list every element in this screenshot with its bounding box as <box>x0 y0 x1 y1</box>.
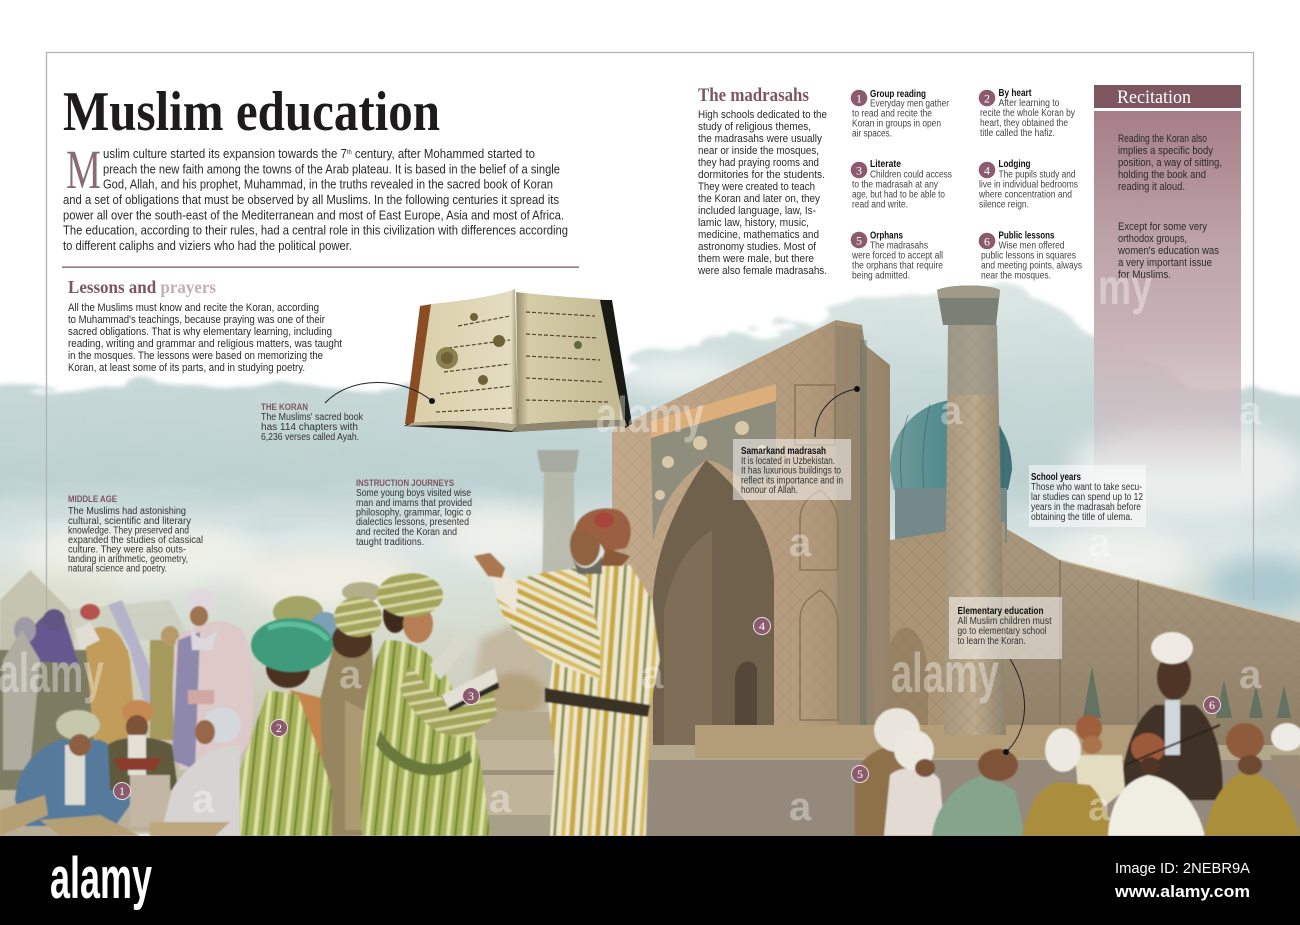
the madrasahs: were also female madrasahs. <box>697 265 827 277</box>
stock watermarks: a <box>1239 653 1262 697</box>
recitation panel: for Muslims. <box>1118 269 1171 281</box>
numbered note 6: public lessons: Wise men offered <box>998 240 1064 252</box>
numbered note 3: literate <box>851 159 952 210</box>
footer bar <box>0 836 1300 925</box>
intro paragraph: to different caliphs and viziers who had the political power. <box>63 238 352 253</box>
numbered note 4: lodging: where concentration and <box>978 190 1072 200</box>
the madrasahs: High schools dedicated to the <box>698 109 827 121</box>
callout: school years <box>1029 465 1146 527</box>
stock watermarks: alamy <box>596 387 704 443</box>
caption: the koran: 6,236 verses called Ayah. <box>261 432 359 443</box>
caption: middle age: natural science and poetry. <box>68 564 167 574</box>
lessons and prayers: Koran, at least some of its parts, and in studying poetry. <box>68 362 305 374</box>
frame <box>46 52 1254 610</box>
callout: school years: obtaining the title of ulema. <box>1031 512 1132 523</box>
the madrasahs: near or inside the mosques, <box>698 145 819 157</box>
numbered note 2: by heart: heart, they obtained the <box>980 118 1068 129</box>
scene number markers <box>114 618 1220 800</box>
numbered note 1: group reading: 1 <box>856 92 862 106</box>
intro paragraph: The education, according to their rules, had a central role in this civilization with differences according <box>63 223 568 238</box>
caption: middle age: The Muslims had astonishing <box>68 506 186 517</box>
terrace in front of the madrasah <box>695 725 1165 758</box>
numbered note 2: by heart <box>979 88 1075 139</box>
numbered note 6: public lessons: and meeting points, always <box>981 260 1082 272</box>
main iwan of the madrasah <box>612 320 890 745</box>
numbered note 1: group reading: air spaces. <box>852 128 892 140</box>
callout: elementary education: to learn the Koran. <box>958 636 1026 647</box>
lessons and prayers: sacred obligations. That is why elementary learning, including <box>68 326 332 338</box>
numbered note 6: public lessons: 6 <box>984 234 990 248</box>
the madrasahs <box>697 85 827 277</box>
lower hall of the madrasah <box>878 522 1005 745</box>
recitation panel: a very important issue <box>1118 257 1212 269</box>
intro paragraph: God, Allah, and his prophet, Muhammad, in the truths revealed in the sacred book of Koran <box>103 177 553 192</box>
caption: instruction journeys: INSTRUCTION JOURNEYS <box>356 478 454 488</box>
callout: elementary education <box>949 597 1062 755</box>
recitation panel <box>1094 85 1241 481</box>
callout: school years: Those who want to take secu- <box>1031 482 1142 493</box>
crowd at the left <box>0 570 254 790</box>
caption: instruction journeys: philosophy, grammar, logic o <box>356 508 471 518</box>
scene number markers: 3 <box>468 689 474 703</box>
footer bar: www.alamy.com <box>1114 882 1250 901</box>
lessons and prayers: in the mosques. The lessons were based on memorizing the <box>68 350 323 362</box>
recitation panel: orthodox groups, <box>1118 233 1187 245</box>
numbered note 1: group reading: Group reading <box>870 89 926 100</box>
title: Muslim education <box>63 81 440 143</box>
numbered note 3: literate: Children could access <box>870 170 952 180</box>
numbered note 4: lodging: 4 <box>984 164 990 178</box>
stock watermarks: a <box>192 777 215 821</box>
numbered note 3: literate: age, but had to be able to <box>852 190 945 200</box>
recitation panel: holding the book and <box>1118 169 1206 181</box>
callout: samarkand madrasah: It has luxurious buildings to <box>741 466 841 476</box>
numbered note 4: lodging <box>978 159 1078 210</box>
callout: samarkand madrasah: Samarkand madrasah <box>741 446 826 457</box>
intro paragraph <box>63 139 568 253</box>
the madrasahs: them were male, but there <box>698 253 814 265</box>
numbered note 4: lodging: The pupils study and <box>998 170 1076 180</box>
numbered note 2: by heart: title called the hafiz. <box>980 128 1055 139</box>
leader line: the koran <box>325 382 435 404</box>
footer bar: alamy <box>50 846 152 911</box>
numbered note 1: group reading: Koran in groups in open <box>852 118 941 130</box>
the madrasahs: they had praying rooms and <box>698 157 819 169</box>
background minaret at left <box>537 450 579 720</box>
numbered note 5: orphans: being admitted. <box>852 270 910 282</box>
intro paragraph: uslim culture started its expansion towards the 7 <box>103 146 376 161</box>
caption: instruction journeys: Some young boys visited wise <box>356 488 471 499</box>
painted sky with haze <box>0 280 1300 840</box>
caption: instruction journeys: taught traditions. <box>356 537 424 548</box>
pupils in front of the teacher at right <box>855 632 1300 836</box>
stock watermarks: a <box>789 785 812 829</box>
callout: samarkand madrasah <box>733 386 860 500</box>
numbered note 2: by heart: recite the whole Koran by <box>980 108 1075 119</box>
scene number markers: 4 <box>759 619 765 633</box>
recitation panel: Recitation <box>1117 87 1191 108</box>
caption: the koran: THE KORAN <box>261 402 308 412</box>
numbered note 3: literate: to the madrasah at any <box>852 180 938 190</box>
callout: elementary education: go to elementary school <box>958 626 1046 637</box>
koran book illustration <box>404 289 632 432</box>
numbered note 2: by heart: After learning to <box>998 98 1060 109</box>
cypress trees <box>1083 666 1291 718</box>
numbered note 1: group reading: to read and recite the <box>852 108 932 120</box>
the madrasahs: lamic law, history, music, <box>698 217 809 229</box>
stock watermarks: a <box>940 389 963 433</box>
numbered note 6: public lessons: near the mosques. <box>981 270 1051 282</box>
lessons and prayers <box>68 277 342 374</box>
caption: instruction journeys <box>356 478 472 548</box>
numbered note 6: public lessons <box>979 230 1082 282</box>
recitation panel: Reading the Koran also <box>1118 133 1207 145</box>
numbered note 3: literate: Literate <box>870 159 901 170</box>
caption: middle age: tanding in arithmetic, geometry, <box>68 554 188 565</box>
ground <box>440 712 1300 836</box>
numbered note 1: group reading <box>851 89 950 140</box>
the madrasahs: The madrasahs <box>698 85 809 106</box>
numbered note 2: by heart: By heart <box>998 88 1032 99</box>
caption: middle age <box>68 494 203 574</box>
numbered note 1: group reading: Everyday men gather <box>870 98 950 110</box>
callout: samarkand madrasah: reflect its importance and in <box>741 476 843 486</box>
numbered note 5: orphans: 5 <box>856 234 862 248</box>
lessons and prayers: reading, writing and grammar and religious matters, was taught <box>68 338 342 350</box>
numbered note 4: lodging: live in individual bedrooms <box>979 180 1078 190</box>
stock watermarks: a <box>1239 389 1262 433</box>
stock watermarks: alamy <box>891 641 999 704</box>
callout: samarkand madrasah: It is located in Uzbekistan. <box>741 456 835 467</box>
numbered note 5: orphans <box>851 230 943 282</box>
caption: the koran <box>261 402 364 443</box>
stock watermarks: a <box>789 521 812 565</box>
caption: middle age: culture. They were also outs- <box>68 544 186 556</box>
recitation panel: position, a way of sitting, <box>1118 157 1222 169</box>
scene number markers: 2 <box>276 721 282 735</box>
footer bar: Image ID: 2NEBR9A <box>1115 860 1250 877</box>
the madrasahs: medicine, mathematics and <box>698 229 819 241</box>
callout: school years: years in the madrasah before <box>1031 502 1141 513</box>
teacher in striped robe <box>474 508 660 836</box>
numbered note 6: public lessons: public lessons in squares <box>981 250 1076 262</box>
recitation panel: implies a specific body <box>1118 145 1213 157</box>
intro paragraph: and a set of obligations that must be observed by all Muslims. In the following centuries it spread its <box>63 192 559 207</box>
the madrasahs: astronomy studies. Most of <box>698 241 817 253</box>
seated scholars <box>0 700 241 836</box>
numbered note 2: by heart: 2 <box>984 92 990 106</box>
intro paragraph: power all over the south-east of the Mediterranean and most of East Europe, Asia and most of Africa. <box>63 207 564 222</box>
numbered note 3: literate: read and write. <box>852 200 908 210</box>
callout: school years: School years <box>1031 472 1081 483</box>
caption: instruction journeys: and recited the Koran and <box>356 527 457 538</box>
scene number markers: 1 <box>119 784 125 798</box>
scene number markers: 6 <box>1209 698 1215 712</box>
stock watermarks: a <box>339 653 362 697</box>
caption: middle age: cultural, scientific and literary <box>68 516 191 527</box>
students standing <box>240 573 499 836</box>
stock watermarks: a <box>489 777 512 821</box>
distant ruins and shrubs <box>470 625 550 717</box>
numbered note 5: orphans: the orphans that require <box>852 260 943 272</box>
intro paragraph: preach the new faith among the towns of the Arab plateau. It is based in the belief of a single <box>103 161 560 176</box>
caption: the koran: The Muslims' sacred book <box>261 412 364 423</box>
recitation panel: reading it aloud. <box>1118 181 1185 193</box>
numbered note 5: orphans: Orphans <box>870 230 903 242</box>
intro paragraph: century, after Mohammed started to <box>352 146 535 161</box>
minaret <box>937 286 1006 735</box>
callout: elementary education: All Muslim children must <box>958 616 1052 627</box>
recitation panel: women's education was <box>1117 245 1219 257</box>
divider rule <box>62 266 579 268</box>
callout: elementary education: Elementary education <box>958 606 1044 617</box>
caption: middle age: expanded the studies of classical <box>68 535 203 546</box>
scene number markers: 5 <box>857 767 863 781</box>
numbered note 5: orphans: The madrasahs <box>870 240 928 252</box>
the madrasahs: the Koran and later on, they <box>698 193 820 205</box>
stock watermarks: a <box>641 653 664 697</box>
far wall of the madrasah <box>1005 528 1300 745</box>
numbered note 4: lodging: Lodging <box>998 159 1031 170</box>
recitation panel: Except for some very <box>1118 221 1207 233</box>
caption: the koran: has 114 chapters with <box>261 422 358 433</box>
lessons and prayers: to Muhammad's teachings, because praying was one of their <box>68 314 325 326</box>
dome <box>890 400 1012 543</box>
lessons and prayers: Lessons and prayers <box>68 277 216 297</box>
stock watermarks: a <box>1088 521 1111 565</box>
numbered note 6: public lessons: Public lessons <box>998 230 1055 242</box>
the madrasahs: study of religious themes, <box>698 121 811 133</box>
stock watermarks: alamy <box>0 641 104 704</box>
the madrasahs: dormitories for the students. <box>698 169 825 181</box>
lessons and prayers: All the Muslims must know and recite the Koran, according <box>68 302 319 314</box>
the madrasahs: They were created to teach <box>698 181 815 193</box>
caption: instruction journeys: man and imams that provided <box>356 498 472 509</box>
caption: middle age: knowledge. They preserved and <box>68 526 189 536</box>
the madrasahs: included language, law, Is- <box>698 205 816 217</box>
the madrasahs: the madrasahs were usually <box>698 133 822 145</box>
callout: samarkand madrasah: honour of Allah. <box>741 485 798 496</box>
caption: instruction journeys: dialectics lessons, presented <box>356 517 469 528</box>
caption: middle age: MIDDLE AGE <box>68 494 117 504</box>
intro paragraph: M <box>66 139 101 200</box>
intro paragraph: th <box>347 149 352 156</box>
stock watermarks: a <box>1088 785 1111 829</box>
numbered note 4: lodging: silence reign. <box>979 200 1029 210</box>
stock watermarks: my <box>1098 259 1152 315</box>
callout: school years: lar studies can spend up to 12 <box>1031 492 1143 503</box>
stock watermarks <box>0 259 1262 829</box>
numbered note 5: orphans: were forced to accept all <box>851 250 943 262</box>
numbered note 3: literate: 3 <box>856 164 862 178</box>
